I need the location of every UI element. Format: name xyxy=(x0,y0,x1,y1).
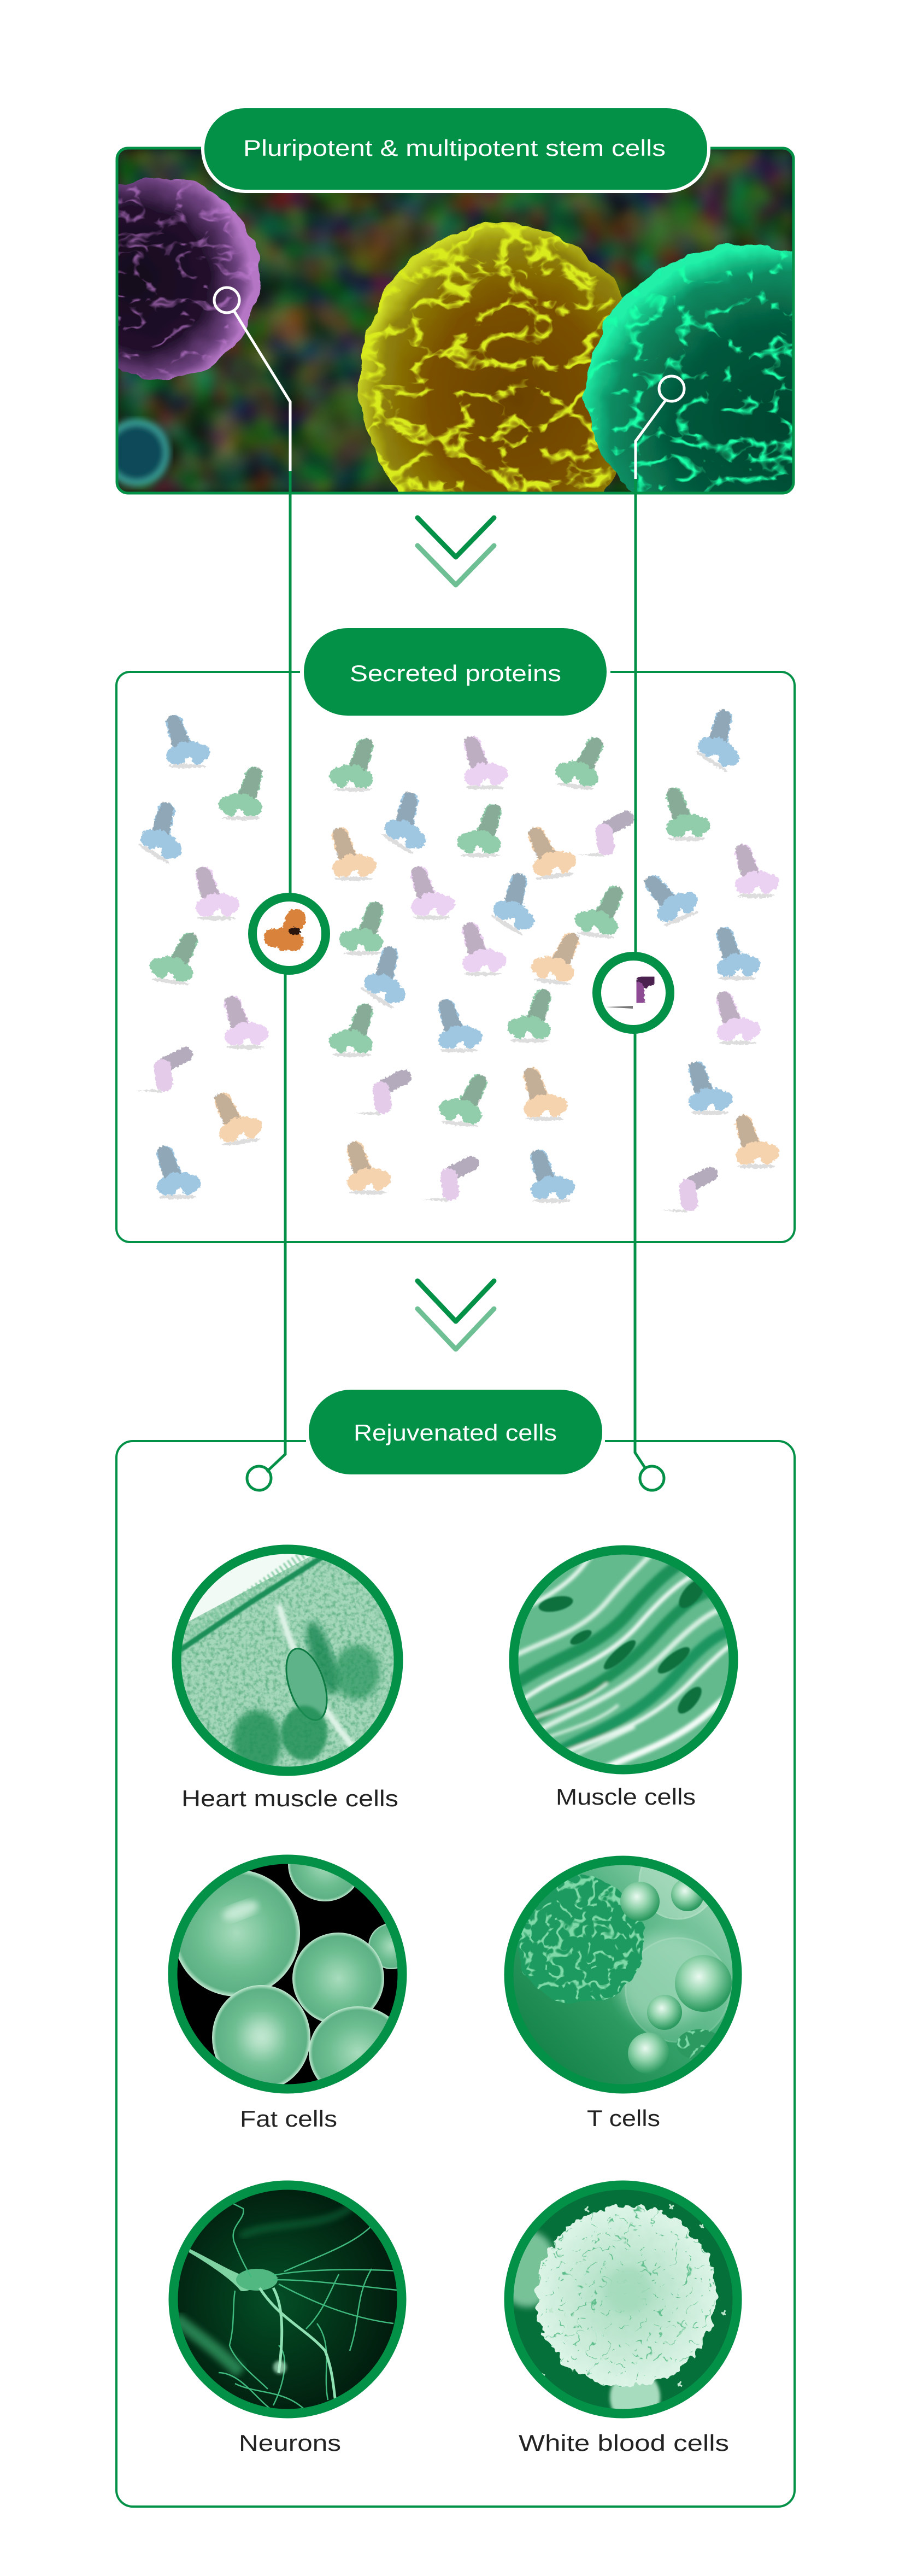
label: heart muscle cells: Heart muscle cells xyxy=(181,1785,398,1811)
cell: neurons xyxy=(168,2180,407,2419)
connector: right pathway xyxy=(635,376,684,1490)
heading: secreted proteins: Secreted proteins xyxy=(350,660,561,686)
label: white blood cells: White blood cells xyxy=(519,2430,729,2456)
cell: muscle cells xyxy=(509,1545,738,1775)
cell: white blood cells xyxy=(497,2180,742,2425)
cell: heart muscle cells xyxy=(164,1536,403,1776)
label: T cells: T cells xyxy=(587,2105,660,2131)
highlighted protein: purple xyxy=(597,956,670,1029)
connector: left pathway xyxy=(214,288,290,1490)
highlighted protein: orange xyxy=(252,897,326,970)
yellow cell xyxy=(357,222,623,492)
heading: secreted proteins xyxy=(304,628,607,716)
arrow: stem cells to proteins xyxy=(418,518,494,585)
cell: T cells xyxy=(505,1842,742,2093)
panel: secreted proteins xyxy=(116,672,795,1242)
protein field xyxy=(135,706,779,1213)
panel: stem cells image xyxy=(116,147,795,494)
blurred cellular background xyxy=(117,148,794,493)
heading: stem cells xyxy=(203,107,709,191)
heading: rejuvenated cells: Rejuvenated cells xyxy=(354,1420,557,1445)
purple cell xyxy=(118,177,261,380)
label: fat cells: Fat cells xyxy=(240,2106,337,2132)
heading: rejuvenated cells xyxy=(309,1390,602,1474)
small teal cell xyxy=(106,422,167,483)
heading: stem cells: Pluripotent & multipotent stem cells xyxy=(243,135,666,161)
cell: fat cells xyxy=(168,1854,407,2094)
label: neurons: Neurons xyxy=(239,2430,341,2456)
label: muscle cells: Muscle cells xyxy=(556,1784,696,1810)
panel: rejuvenated cells xyxy=(116,1441,795,2507)
arrow: proteins to rejuvenated cells xyxy=(418,1281,494,1349)
green cell xyxy=(581,243,792,492)
panel border xyxy=(117,148,794,493)
